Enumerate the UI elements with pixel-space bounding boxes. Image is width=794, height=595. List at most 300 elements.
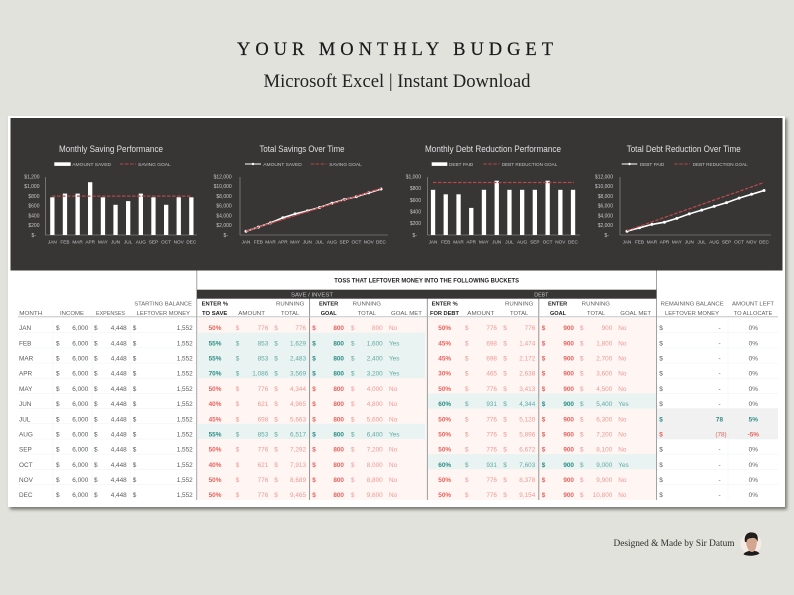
row: MAY: 1,552 <box>177 386 193 393</box>
row: JAN: $ <box>503 325 507 332</box>
chart: total debt reduction over time: MAY <box>672 240 683 244</box>
row: MAR: 2,700 <box>596 356 613 363</box>
row: APR: 1,552 <box>177 371 193 378</box>
row: JUL: $ <box>659 416 663 423</box>
row: JAN: 50% <box>209 325 222 332</box>
row: MAR: 698 <box>486 356 497 363</box>
row: MAY: $ <box>542 386 546 393</box>
row: OCT: $ <box>312 462 316 469</box>
row: OCT: 6,000 <box>72 462 89 469</box>
table column headers: ENTER <box>548 301 567 307</box>
row: JAN: $ <box>274 325 278 332</box>
chart: monthly saving performance: $1,200 <box>24 174 40 180</box>
row: DEC: 900 <box>563 492 574 499</box>
row: AUG: 900 <box>563 432 574 438</box>
row: SEP: No <box>618 447 627 454</box>
chart: monthly debt reduction performance: $- <box>413 233 417 239</box>
row: APR: 3,200 <box>367 371 383 378</box>
table column headers: AMOUNT <box>467 311 495 317</box>
row: APR: $ <box>236 371 240 378</box>
row: AUG: No <box>618 432 627 438</box>
row: NOV: No <box>618 477 627 484</box>
row: APR: $ <box>312 371 316 378</box>
row: JAN: No <box>389 325 398 332</box>
row: MAY: $ <box>465 386 469 393</box>
row: NOV: 800 <box>333 477 344 484</box>
row: JUN: $ <box>580 401 584 408</box>
row: NOV: - <box>719 477 721 484</box>
chart: total debt reduction over time <box>595 144 771 244</box>
row: NOV: 776 <box>486 477 497 484</box>
row: JUN: 4,800 <box>367 401 383 408</box>
row: MAY: 900 <box>563 386 574 393</box>
row: MAY: $ <box>351 386 355 393</box>
row: FEB: FEB <box>19 340 31 347</box>
row: NOV: 776 <box>258 477 269 484</box>
row: JAN: 900 <box>563 325 574 332</box>
row: JUL: 776 <box>486 416 497 423</box>
chart: monthly saving performance: SAVING GOAL <box>138 162 171 168</box>
row: JAN: 776 <box>295 325 306 332</box>
row: JUN: 0% <box>749 401 758 408</box>
row: APR: $ <box>56 371 60 378</box>
row: NOV: 8,378 <box>519 477 536 484</box>
row: JUN: 621 <box>258 401 269 408</box>
row: JUL: 5,600 <box>367 416 383 423</box>
row: MAR: $ <box>133 356 137 363</box>
row: APR: 4,448 <box>111 371 127 378</box>
row: DEC: $ <box>659 492 663 499</box>
row: MAR: 2,400 <box>367 356 383 363</box>
row: JUN: $ <box>56 401 60 408</box>
row: SEP: $ <box>94 447 98 454</box>
row: AUG: $ <box>56 432 60 438</box>
row: AUG: $ <box>659 432 663 438</box>
row: DEC: 776 <box>258 492 269 499</box>
row: OCT: OCT <box>19 462 33 469</box>
row: AUG: $ <box>133 432 137 438</box>
row: OCT: 931 <box>486 462 497 469</box>
row: MAR: $ <box>580 356 584 363</box>
chart: total savings over time: APR <box>278 240 288 244</box>
row: JAN: 800 <box>372 325 383 332</box>
row: FEB: $ <box>312 340 316 347</box>
chart: total debt reduction over time: SEP <box>722 240 731 244</box>
row: NOV: 50% <box>438 477 451 484</box>
table column headers: RUNNING <box>353 301 381 307</box>
row: JUN: 40% <box>209 401 222 408</box>
row: SEP: 7,292 <box>290 447 306 454</box>
row: MAY: $ <box>133 386 137 393</box>
row: FEB: $ <box>56 340 60 347</box>
row: OCT <box>19 462 758 469</box>
row: MAY: 0% <box>749 386 758 393</box>
chart: total savings over time: $2,000 <box>216 223 232 229</box>
row: FEB: $ <box>659 340 663 347</box>
row: JUN: $ <box>659 401 663 408</box>
row: NOV: $ <box>236 477 240 484</box>
row: JUL: $ <box>351 416 355 423</box>
panel: dark chart dashboard <box>10 118 782 270</box>
row: MAR: 2,483 <box>290 356 306 363</box>
credit line: Designed & Made by Sir Datum <box>614 539 735 549</box>
chart: monthly saving performance <box>24 144 197 244</box>
row: OCT: $ <box>133 462 137 469</box>
row: OCT: 0% <box>749 462 758 469</box>
row: JUN: 6,000 <box>72 401 89 408</box>
row: AUG: 776 <box>486 432 497 438</box>
row: NOV: 8,689 <box>290 477 306 484</box>
row: MAR: $ <box>236 356 240 363</box>
row: JUL: 6,000 <box>72 416 89 423</box>
row: JUN: $ <box>503 401 507 408</box>
row: OCT: 4,448 <box>111 462 127 469</box>
row: DEC: $ <box>312 492 316 499</box>
row: APR: 900 <box>563 371 574 378</box>
row: AUG: $ <box>503 432 507 438</box>
row: JUN: 60% <box>438 401 451 408</box>
row: SEP: 800 <box>333 447 344 454</box>
row: MAY: No <box>618 386 627 393</box>
chart: total savings over time: JUN <box>303 240 312 244</box>
row: SEP: 50% <box>438 447 451 454</box>
row: DEC: $ <box>236 492 240 499</box>
card shadow <box>10 118 787 510</box>
row: JUL: No <box>389 416 398 423</box>
row: MAY: 4,448 <box>111 386 127 393</box>
row: MAR: 1,552 <box>177 356 193 363</box>
row: APR: 2,638 <box>519 371 536 378</box>
row: JAN: 50% <box>438 325 451 332</box>
chart: total savings over time: FEB <box>254 240 263 244</box>
row: AUG: 7,200 <box>596 432 613 438</box>
chart: monthly saving performance: $- <box>32 233 36 239</box>
row: JUL: $ <box>133 416 137 423</box>
row: SEP: $ <box>659 447 663 454</box>
row: DEC: 4,448 <box>111 492 127 499</box>
row: MAY: $ <box>503 386 507 393</box>
chart: monthly debt reduction performance: AUG <box>517 240 528 244</box>
row: NOV: $ <box>274 477 278 484</box>
chart: total debt reduction over time: $- <box>605 233 609 239</box>
chart: total savings over time: NOV <box>364 240 375 244</box>
row: DEC: 50% <box>209 492 222 499</box>
row: OCT: $ <box>580 462 584 469</box>
chart: monthly saving performance: OCT <box>161 240 171 244</box>
row: JUN: 4,344 <box>519 401 536 408</box>
row: JAN: $ <box>133 325 137 332</box>
row: SEP: 6,672 <box>519 447 536 454</box>
row: AUG: 5,896 <box>519 432 536 438</box>
row: MAR: 800 <box>333 356 344 363</box>
row: NOV: No <box>389 477 398 484</box>
chart: monthly debt reduction performance: DEBT PAID <box>449 162 474 168</box>
chart: total debt reduction over time: JAN <box>623 240 631 244</box>
row: JUL: 5,663 <box>290 416 306 423</box>
table column headers: GOAL MET <box>620 311 652 317</box>
row: OCT: 900 <box>563 462 574 469</box>
table column headers: INCOME <box>60 311 84 317</box>
row: FEB: 1,552 <box>177 340 193 347</box>
row: OCT: 621 <box>258 462 269 469</box>
chart: total savings over time: $- <box>224 233 228 239</box>
row: FEB: $ <box>465 340 469 347</box>
row: JUL: 1,552 <box>177 416 193 423</box>
row: DEC: $ <box>542 492 546 499</box>
row: JUN: $ <box>274 401 278 408</box>
row: AUG: $ <box>236 432 240 438</box>
row: APR: $ <box>94 371 98 378</box>
row: SEP: 900 <box>563 447 574 454</box>
row: DEC: $ <box>94 492 98 499</box>
row: JUN: $ <box>236 401 240 408</box>
row: OCT: 7,913 <box>290 462 306 469</box>
chart: monthly saving performance: $400 <box>28 213 40 219</box>
row: MAY: 776 <box>258 386 269 393</box>
chart: monthly saving performance: JUL <box>124 240 133 244</box>
chart: total debt reduction over time: $8,000 <box>598 194 613 200</box>
row: JUL: 800 <box>333 416 344 423</box>
row: JUL: $ <box>580 416 584 423</box>
row: SEP: $ <box>503 447 507 454</box>
row: MAR <box>19 356 758 363</box>
row: JAN: 776 <box>525 325 536 332</box>
chart: monthly saving performance: NOV <box>174 240 185 244</box>
chart: total savings over time: DEC <box>376 240 387 244</box>
table column headers: LEFTOVER MONEY <box>665 311 719 317</box>
chart: total debt reduction over time: DEBT PAID <box>640 162 665 168</box>
row: JAN: 0% <box>749 325 758 332</box>
row: APR: 465 <box>486 371 497 378</box>
chart: total debt reduction over time: $2,000 <box>598 223 613 229</box>
row: JAN: $ <box>542 325 546 332</box>
row: AUG: $ <box>312 432 316 438</box>
chart: monthly saving performance: DEC <box>186 240 197 244</box>
chart: monthly saving performance: $200 <box>28 223 40 229</box>
chart: total savings over time: AMOUNT SAVED <box>263 162 302 168</box>
row: MAY <box>19 386 758 393</box>
row: FEB: No <box>618 340 627 347</box>
row: JAN: $ <box>659 325 663 332</box>
row: JUL: $ <box>94 416 98 423</box>
row: SEP: 4,448 <box>111 447 127 454</box>
row: JAN: 6,000 <box>72 325 89 332</box>
row: JUN <box>19 401 758 408</box>
row: JAN: $ <box>312 325 316 332</box>
chart: total savings over time <box>214 144 388 244</box>
row: OCT: 1,552 <box>177 462 193 469</box>
row: APR: $ <box>274 371 278 378</box>
row: SEP: $ <box>133 447 137 454</box>
row: DEC: $ <box>274 492 278 499</box>
row: JUN: $ <box>133 401 137 408</box>
row: APR: APR <box>19 371 33 378</box>
row: JUL: 698 <box>258 416 269 423</box>
row: MAR: 45% <box>438 356 451 363</box>
row: FEB: 45% <box>438 340 451 347</box>
row: APR: 800 <box>333 371 344 378</box>
chart: monthly saving performance: $800 <box>28 194 40 200</box>
row: MAR: $ <box>274 356 278 363</box>
chart: total debt reduction over time: JUN <box>685 240 694 244</box>
chart: total savings over time: $6,000 <box>216 204 232 210</box>
chart: monthly debt reduction performance: APR <box>466 240 477 244</box>
chart: monthly saving performance: JUN <box>111 240 120 244</box>
row: JUL: $ <box>56 416 60 423</box>
row: APR: - <box>719 371 721 378</box>
row: MAR: 6,000 <box>72 356 89 363</box>
row: NOV <box>19 477 758 484</box>
row: DEC: 9,465 <box>290 492 306 499</box>
row: FEB: $ <box>351 340 355 347</box>
row: JUL: $ <box>312 416 316 423</box>
spreadsheet card <box>8 116 785 507</box>
row: SEP: 8,100 <box>596 447 613 454</box>
chart: total debt reduction over time: $12,000 <box>595 174 613 180</box>
chart: total savings over time: $10,000 <box>214 184 232 190</box>
row: JUL: $ <box>274 416 278 423</box>
table column headers: MONTH <box>19 311 42 317</box>
table column headers: TOTAL <box>281 311 299 317</box>
row: MAR: 2,172 <box>519 356 536 363</box>
chart: monthly debt reduction performance: JUL <box>505 240 514 244</box>
table column headers: GOAL <box>550 311 567 317</box>
table column headers: STARTING BALANCE <box>134 301 192 307</box>
row: FEB: $ <box>94 340 98 347</box>
row: DEC: 6,000 <box>72 492 89 499</box>
table column headers: TOTAL <box>510 311 528 317</box>
row: JUL: 900 <box>563 416 574 423</box>
row: MAR: $ <box>312 356 316 363</box>
row: FEB: 0% <box>749 340 758 347</box>
chart: total debt reduction over time: JUL <box>698 240 706 244</box>
row: JUN: 931 <box>486 401 497 408</box>
section band: save / invest and debt <box>197 290 656 299</box>
table column headers <box>19 301 775 317</box>
chart: monthly saving performance: APR <box>85 240 96 244</box>
row: MAR: $ <box>542 356 546 363</box>
chart: total savings over time: SEP <box>340 240 349 244</box>
row: FEB: 698 <box>486 340 497 347</box>
chart: total debt reduction over time: FEB <box>635 240 644 244</box>
row: JAN: $ <box>580 325 584 332</box>
row: MAR: 55% <box>209 356 222 363</box>
chart: monthly saving performance: $600 <box>28 204 40 210</box>
chart: monthly debt reduction performance: OCT <box>543 240 553 244</box>
table column headers: LEFTOVER MONEY <box>137 311 190 317</box>
table column headers: REMAINING BALANCE <box>661 301 724 307</box>
row: NOV: $ <box>659 477 663 484</box>
row: AUG: $ <box>465 432 469 438</box>
row: SEP: No <box>389 447 398 454</box>
row: FEB: $ <box>503 340 507 347</box>
row: FEB: $ <box>580 340 584 347</box>
row: JAN: 1,552 <box>177 325 193 332</box>
row: JUN: No <box>389 401 398 408</box>
row: APR: $ <box>659 371 663 378</box>
row: MAY: No <box>389 386 398 393</box>
row: OCT: $ <box>542 462 546 469</box>
row: FEB: 900 <box>563 340 574 347</box>
row: APR: 6,000 <box>72 371 89 378</box>
row: SEP: $ <box>542 447 546 454</box>
row: MAR: $ <box>56 356 60 363</box>
row: FEB: 6,000 <box>72 340 89 347</box>
row: FEB: $ <box>274 340 278 347</box>
row: JUN: 4,448 <box>111 401 127 408</box>
row: OCT: $ <box>236 462 240 469</box>
row: MAY: $ <box>94 386 98 393</box>
row: OCT: $ <box>274 462 278 469</box>
row: AUG: 1,552 <box>177 432 193 438</box>
row: SEP: - <box>719 447 721 454</box>
chart: monthly saving performance: MAY <box>98 240 109 244</box>
row: MAY: 4,500 <box>596 386 613 393</box>
row: SEP: $ <box>56 447 60 454</box>
row: AUG: 50% <box>438 432 451 438</box>
row: SEP: 1,552 <box>177 447 193 454</box>
row: MAY: $ <box>236 386 240 393</box>
chart: total savings over time: $12,000 <box>214 174 232 180</box>
row: NOV: 900 <box>563 477 574 484</box>
row: MAY: $ <box>56 386 60 393</box>
chart: monthly debt reduction performance: $400 <box>410 210 421 216</box>
row: DEC: 1,552 <box>177 492 193 499</box>
row: MAY: 776 <box>486 386 497 393</box>
table column headers: ENTER <box>319 301 338 307</box>
chart: total savings over time: JAN <box>242 240 250 244</box>
row: MAR: $ <box>351 356 355 363</box>
row: JAN: 4,448 <box>111 325 127 332</box>
table column headers: AMOUNT LEFT <box>732 301 775 307</box>
row: JAN: 776 <box>486 325 497 332</box>
chart: monthly debt reduction performance: SEP <box>530 240 539 244</box>
chart: total debt reduction over time: $4,000 <box>598 213 613 219</box>
row: MAR: 0% <box>749 356 758 363</box>
row: APR: 30% <box>438 371 451 378</box>
row: NOV: $ <box>465 477 469 484</box>
table column headers: TOTAL <box>587 311 605 317</box>
row: FEB: 1,629 <box>290 340 306 347</box>
row: JUL: $ <box>503 416 507 423</box>
row: MAR: $ <box>465 356 469 363</box>
row: AUG: 55% <box>209 432 222 438</box>
row: DEC <box>19 492 758 499</box>
row: JUN: $ <box>94 401 98 408</box>
chart: total debt reduction over time: Total Debt Reduction Over Time <box>627 144 741 154</box>
row: JUN: 900 <box>563 401 574 408</box>
row: AUG: $ <box>274 432 278 438</box>
row: MAR: No <box>618 356 627 363</box>
row: NOV: 50% <box>209 477 222 484</box>
row: NOV: 4,448 <box>111 477 127 484</box>
chart: monthly debt reduction performance: $600 <box>410 198 421 204</box>
row: JUL: 50% <box>438 416 451 423</box>
chart: monthly debt reduction performance: DEC <box>568 240 579 244</box>
chart: monthly saving performance: FEB <box>60 240 69 244</box>
row: JAN <box>19 325 758 332</box>
row: JAN: 776 <box>258 325 269 332</box>
row: NOV: 1,552 <box>177 477 193 484</box>
row: AUG <box>19 432 759 438</box>
row: MAY: 50% <box>438 386 451 393</box>
row: DEC: - <box>719 492 721 499</box>
row: MAR: $ <box>94 356 98 363</box>
chart: monthly debt reduction performance: Monthly Debt Reduction Performance <box>425 144 561 154</box>
row: NOV: 8,800 <box>367 477 383 484</box>
chart: total savings over time: MAY <box>290 240 301 244</box>
row: DEC: 10,800 <box>593 492 613 499</box>
